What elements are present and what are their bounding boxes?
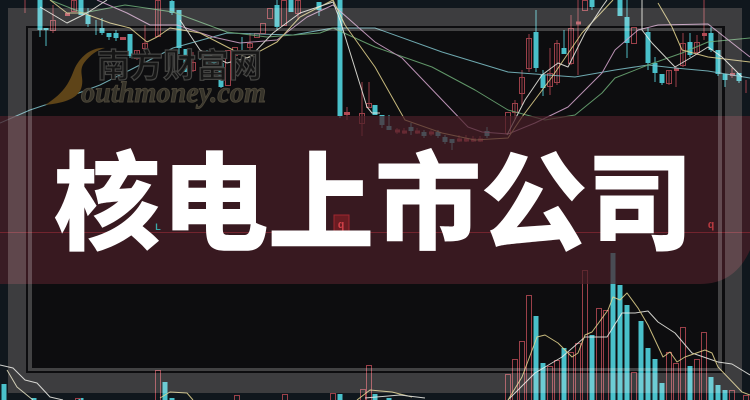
title: 公: [480, 144, 588, 264]
title: 司: [586, 144, 694, 264]
cyan candle bodies: [40, 0, 739, 143]
white volume line: [508, 311, 750, 400]
chart marker: boxed q: [334, 215, 349, 232]
volume bars: [4, 253, 748, 400]
green moving average: [50, 0, 750, 120]
inner frame line: [28, 28, 722, 371]
yellow moving average: [50, 0, 613, 140]
cyan candle wicks: [40, 0, 739, 150]
maroon title band: [0, 116, 750, 284]
teal long moving average: [0, 28, 750, 123]
chart marker: boxed q: q: [338, 220, 344, 232]
red hollow candle bodies: [50, 0, 700, 134]
red candle wicks: [25, 0, 746, 142]
watermark logo: [45, 47, 266, 109]
watermark domain: outhmoney.com: [81, 76, 266, 109]
chart marker: L: L: [155, 222, 161, 232]
pink moving average: [97, 0, 750, 134]
title: 电: [161, 144, 269, 264]
icon: brown swoosh: [45, 48, 105, 105]
cyan volume bars: [4, 253, 725, 400]
volume moving average lines: [0, 293, 750, 400]
moving average lines: [0, 0, 750, 140]
title: 上: [267, 144, 375, 264]
small filled red candles: [65, 14, 735, 140]
red hollow volume bars: [76, 270, 748, 400]
price reference line: [0, 232, 750, 233]
white moving average: [40, 0, 107, 23]
chart marker: q: q: [708, 220, 714, 232]
watermark Chinese name: 南方财富网: [97, 47, 262, 84]
candlestick chart: [25, 0, 746, 150]
title: [53, 144, 694, 264]
title: 核: [53, 144, 161, 264]
left volume lines: [0, 365, 63, 400]
title: 市: [374, 144, 482, 264]
yellow volume line: [508, 293, 750, 400]
